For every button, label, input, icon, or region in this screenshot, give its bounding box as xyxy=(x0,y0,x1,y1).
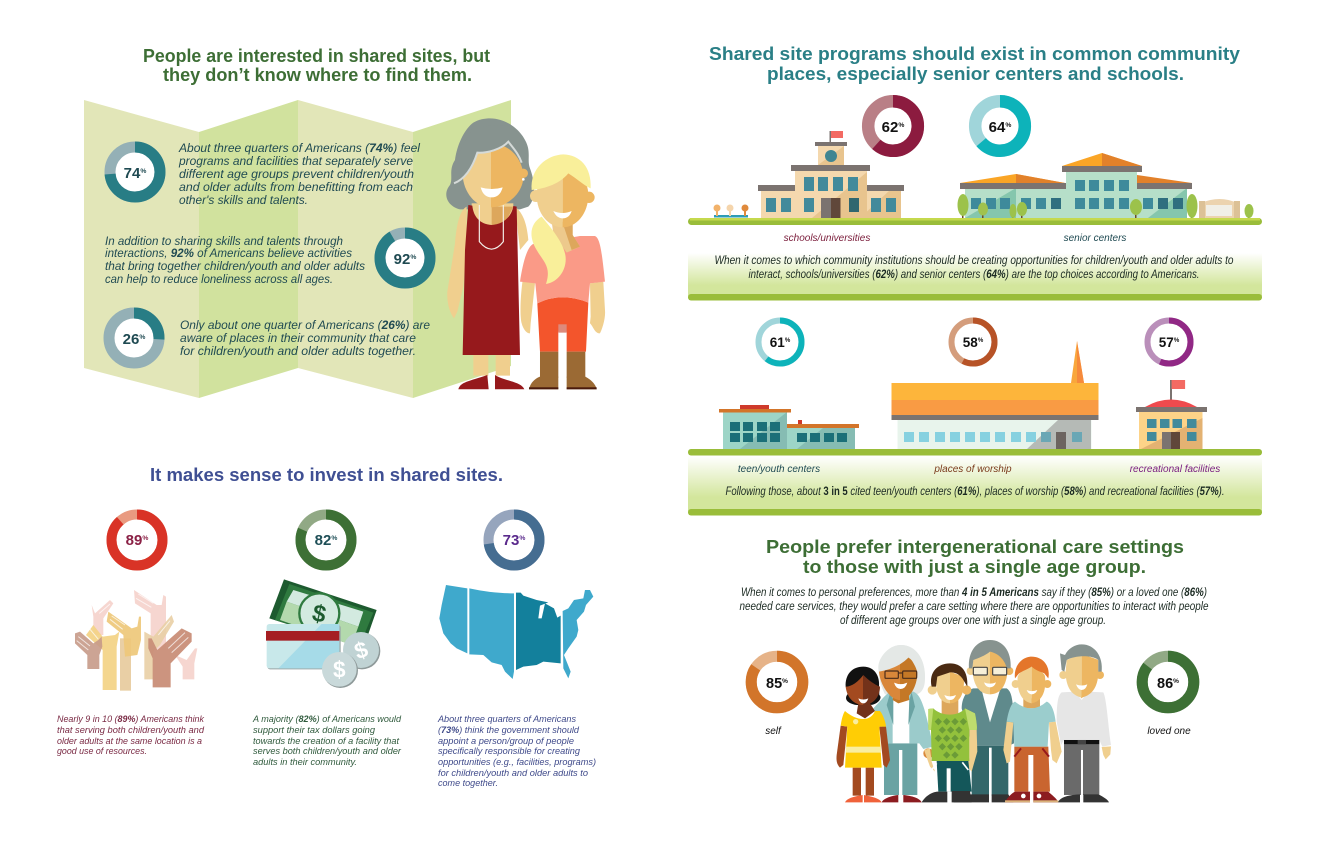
band: top choices statement xyxy=(688,253,1262,300)
illustration: teen center xyxy=(719,405,859,449)
text: 73 percent statement: come together. xyxy=(438,778,498,789)
donut: 85 percent: % xyxy=(782,678,788,685)
label: self: self xyxy=(765,726,782,737)
older man in suit xyxy=(953,640,1014,802)
text: 26 percent statement xyxy=(180,320,430,358)
panel: shared sites awareness xyxy=(84,45,605,398)
ground line xyxy=(688,218,1262,225)
donut: 26 percent: 26 xyxy=(123,331,139,348)
donut: 58 percent: 58 xyxy=(963,335,978,350)
text: 73 percent statement: appoint a person/group of people xyxy=(438,736,574,747)
text: 89 percent statement: good use of resources. xyxy=(57,746,147,757)
text: 82 percent statement: towards the creation of a facility that xyxy=(253,736,399,747)
donut: 86 percent: 86 xyxy=(1157,676,1173,692)
donut: 82 percent: 82 xyxy=(315,532,331,549)
label: schools/universities: schools/universities xyxy=(784,233,870,244)
text: 26 percent statement: for children/youth and older adults together. xyxy=(180,346,416,358)
text: 82 percent statement: support their tax dollars going xyxy=(253,725,376,736)
illustration: recreational facility xyxy=(1136,380,1207,450)
donut: 58 percent: % xyxy=(978,338,984,344)
donut: 92 percent xyxy=(380,233,430,283)
text: 89 percent statement: that serving both children/youth and xyxy=(57,725,205,736)
panel: intergenerational care xyxy=(740,536,1208,802)
heading: shared site programs: Shared site programs should exist in common community xyxy=(709,43,1241,64)
heading: people prefer: to those with just a single age group. xyxy=(803,556,1146,577)
text: care preferences statement xyxy=(740,587,1208,627)
icon: raised hands xyxy=(75,590,197,691)
illustration: place of worship xyxy=(892,341,1098,449)
text: 74 percent statement: different age groups prevent children/youth xyxy=(179,169,414,181)
heading: people prefer xyxy=(766,536,1184,577)
donut: 74 percent: % xyxy=(140,168,146,175)
text: 73 percent statement: specifically responsible for creating xyxy=(438,746,581,757)
donut: 86 percent xyxy=(1142,656,1194,708)
donut: 62 percent xyxy=(868,101,918,151)
icon: money, credit card and coins xyxy=(266,579,380,688)
icon: money, credit card and coins: $ xyxy=(310,600,328,629)
heading: shared site programs xyxy=(709,43,1241,84)
text: 92 percent statement: In addition to sharing skills and talents through xyxy=(105,236,343,248)
text: 89 percent statement: Nearly 9 in 10 (89%) Americans think xyxy=(57,714,205,725)
band: following choices statement xyxy=(688,449,1262,516)
donut: 61 percent: % xyxy=(785,338,791,344)
text: 89 percent statement xyxy=(57,714,205,757)
donut: 64 percent: 64 xyxy=(989,119,1005,136)
text: 82 percent statement: serves both children/youth and older xyxy=(253,746,402,757)
donut: 92 percent: % xyxy=(410,254,416,261)
illustration: senior center building xyxy=(960,153,1192,218)
illustration: trees and gate xyxy=(958,194,1254,218)
band: top choices statement: interact, schools/universities (62%) and senior centers (64%) are the top choices according to Americans. xyxy=(748,269,1200,281)
text: 82 percent statement: A majority (82%) of Americans would xyxy=(252,714,402,725)
heading: it makes sense: It makes sense to invest in shared sites. xyxy=(150,464,503,485)
donut: 86 percent: % xyxy=(1173,678,1179,685)
donut: 74 percent: 74 xyxy=(124,165,140,182)
text: care preferences statement: needed care services, they would prefer a care setting where there are opportunities to interact with people xyxy=(740,601,1208,613)
donut: 82 percent: % xyxy=(331,535,337,542)
donut: 57 percent: 57 xyxy=(1159,335,1174,350)
text: 26 percent statement: Only about one quarter of Americans ( 26%) are xyxy=(180,320,430,332)
donut: 73 percent xyxy=(488,514,540,566)
panel: invest in shared sites xyxy=(57,464,596,789)
donut: 73 percent: 73 xyxy=(503,532,519,549)
heading: people are interested: they don’t know where to find them. xyxy=(163,64,472,85)
donut: 74 percent xyxy=(110,147,160,197)
text: 92 percent statement: that bring together children/youth and older adults xyxy=(105,261,365,273)
icon: US map xyxy=(439,585,593,679)
older man in white shirt xyxy=(1057,644,1111,802)
label: loved one: loved one xyxy=(1147,726,1191,737)
donut: 89 percent: 89 xyxy=(126,532,142,549)
panel: common community places xyxy=(688,43,1262,516)
heading: people prefer: People prefer intergenerational care settings xyxy=(766,536,1184,557)
boy in green sweater xyxy=(922,663,977,802)
donut: 85 percent xyxy=(751,656,803,708)
donut: 73 percent: % xyxy=(519,535,525,542)
illustration: playground xyxy=(714,204,748,218)
icon: money, credit card and coins: $ xyxy=(333,656,346,682)
illustration: group of people xyxy=(836,640,1111,802)
label: recreational facilities: recreational facilities xyxy=(1130,464,1220,475)
donut: 85 percent: 85 xyxy=(766,676,782,692)
band: following choices statement: Following those, about 3 in 5 cited teen/youth centers (61%), places of worship (58%) and recreational facilities (57%). xyxy=(726,486,1224,498)
young girl in yellow dress xyxy=(836,667,890,802)
donut: 92 percent: 92 xyxy=(394,251,410,268)
illustration: school building xyxy=(758,131,904,218)
older woman with glasses xyxy=(873,645,933,802)
text: 74 percent statement xyxy=(178,143,420,207)
label: places of worship: places of worship xyxy=(933,464,1012,475)
donut: 62 percent: % xyxy=(898,122,904,129)
text: 82 percent statement: adults in their community. xyxy=(253,757,357,768)
donut: 26 percent xyxy=(109,313,159,363)
text: 73 percent statement: About three quarters of Americans xyxy=(437,714,576,725)
text: 89 percent statement: older adults at the same location is a xyxy=(57,736,202,747)
text: care preferences statement: of different age groups over one with just a single age group. xyxy=(840,615,1106,627)
donut: 26 percent: % xyxy=(139,334,145,341)
donut: 89 percent xyxy=(112,514,162,566)
text: 92 percent statement: can help to reduce loneliness across all ages. xyxy=(105,274,333,286)
text: care preferences statement: When it comes to personal preferences, more than 4 in 5 Americans say if they (85%) or a loved one (86%) xyxy=(741,587,1207,599)
folded map background xyxy=(84,100,511,398)
text: 73 percent statement: (73%) think the government should xyxy=(438,725,580,736)
text: 74 percent statement: About three quarters of Americans ( 74%) feel xyxy=(178,143,420,155)
donut: 61 percent: 61 xyxy=(770,335,785,350)
text: 73 percent statement: opportunities (e.g., facilities, programs) xyxy=(438,757,596,768)
icon: money, credit card and coins: $ xyxy=(351,636,371,664)
label: senior centers: senior centers xyxy=(1064,233,1126,244)
donut: 89 percent: % xyxy=(142,535,148,542)
text: 74 percent statement: other's skills and talents. xyxy=(179,195,308,207)
donut: 57 percent xyxy=(1148,320,1190,364)
text: 73 percent statement xyxy=(437,714,596,789)
label: teen/youth centers: teen/youth centers xyxy=(738,464,820,475)
text: 92 percent statement xyxy=(105,236,365,286)
young woman xyxy=(520,154,605,389)
donut: 61 percent xyxy=(758,320,802,364)
red-haired boy xyxy=(1003,657,1062,802)
donut: 64 percent xyxy=(975,101,1025,151)
older woman xyxy=(446,118,534,389)
text: 74 percent statement: and older adults from benefitting from each xyxy=(179,182,413,194)
donut: 57 percent: % xyxy=(1174,338,1180,344)
text: 73 percent statement: for children/youth and older adults to xyxy=(438,768,588,779)
heading: people are interested xyxy=(143,45,490,85)
text: 92 percent statement: interactions, 92% of Americans believe activities xyxy=(105,248,352,260)
text: 26 percent statement: aware of places in their community that care xyxy=(180,333,416,345)
donut: 64 percent: % xyxy=(1005,122,1011,129)
heading: shared site programs: places, especially senior centers and schools. xyxy=(767,63,1184,84)
donut: 82 percent xyxy=(300,514,352,566)
donut: 62 percent: 62 xyxy=(882,119,898,136)
donut: 58 percent xyxy=(952,320,994,364)
text: 74 percent statement: programs and facilities that separately serve xyxy=(178,156,413,168)
text: 82 percent statement xyxy=(252,714,402,768)
band: top choices statement: When it comes to which community institutions should be creating opportunities for children/youth and older adults to xyxy=(714,255,1234,267)
illustration: older woman and young woman xyxy=(446,118,605,389)
heading: people are interested: People are interested in shared sites, but xyxy=(143,45,490,66)
